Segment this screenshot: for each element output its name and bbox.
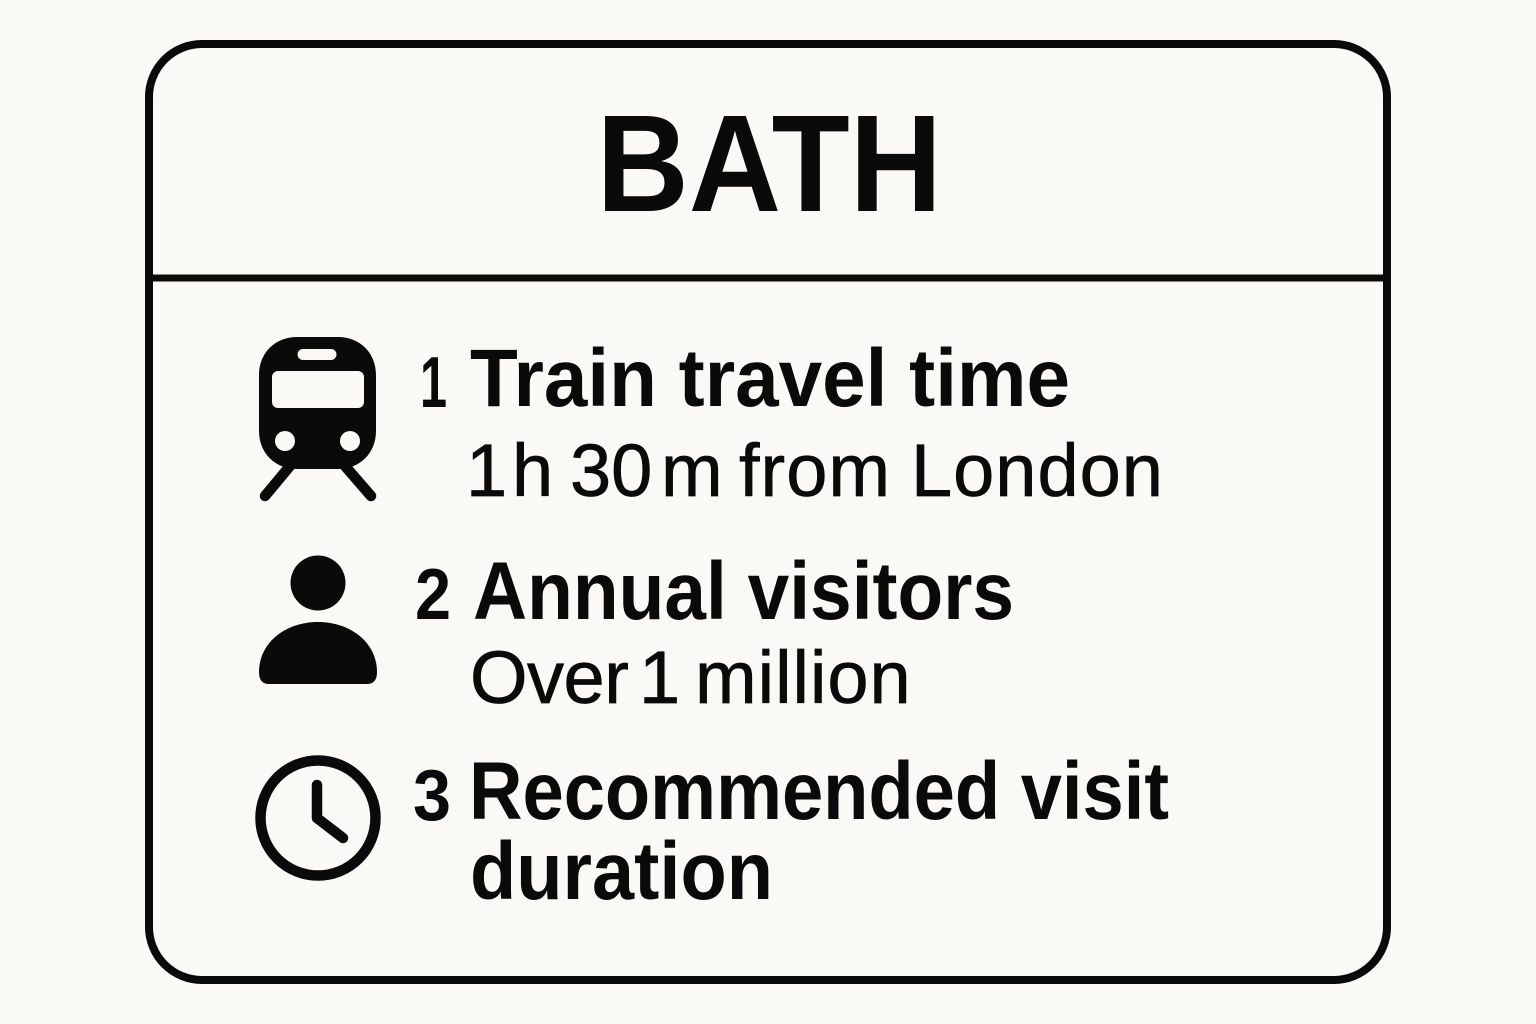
heading: train travel time: Train travel time bbox=[470, 333, 1070, 424]
text: journey from London: from bbox=[739, 429, 891, 512]
panel: card outline bbox=[149, 44, 1387, 980]
row 3: recommended visit duration bbox=[260, 746, 1169, 917]
heading: recommended visit duration: Recommended visit bbox=[469, 746, 1169, 837]
number 1: 1 bbox=[420, 343, 447, 423]
icon: person bbox=[259, 556, 377, 684]
row 2: annual visitors bbox=[259, 546, 1014, 719]
text: journey from London: 1 bbox=[466, 429, 507, 512]
number 2: 2 bbox=[415, 555, 451, 635]
icon: clock bbox=[260, 760, 376, 876]
text: visitor count: 1 bbox=[639, 636, 680, 719]
text: journey from London: 30 bbox=[570, 429, 652, 512]
icon: train bbox=[259, 337, 376, 496]
heading: annual visitors: Annual visitors bbox=[473, 546, 1014, 637]
text: journey from London: m bbox=[661, 429, 723, 512]
text: journey from London: h bbox=[512, 429, 553, 512]
heading: second line: duration bbox=[470, 826, 773, 917]
text: journey from London: London bbox=[911, 429, 1164, 512]
row 1: train travel time bbox=[259, 333, 1164, 512]
number 3: 3 bbox=[413, 756, 451, 836]
text: visitor count: million bbox=[695, 636, 912, 719]
title: BATH bbox=[596, 87, 942, 241]
text: visitor count: Over bbox=[470, 636, 628, 719]
